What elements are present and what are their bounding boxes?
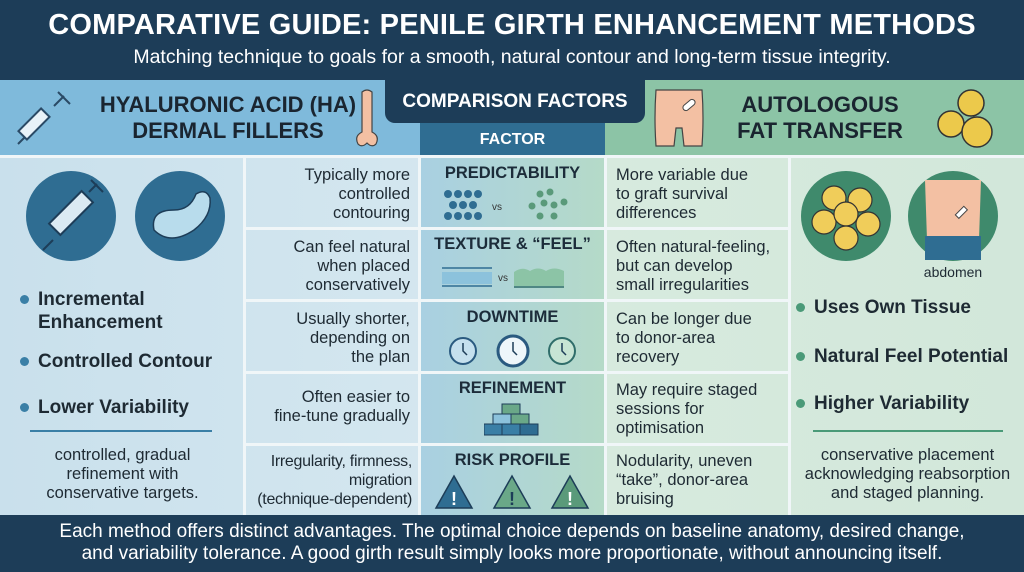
factor header: FACTOR [480, 131, 545, 148]
header: HA fillers [0, 80, 420, 155]
bullet list HA: Lower Variability [38, 397, 189, 418]
icon: fat cells circle [801, 171, 891, 261]
label abdomen: abdomen [924, 264, 982, 280]
icon: fat globules [937, 89, 993, 148]
text: to donor-area [616, 329, 715, 347]
text: fine-tune gradually [274, 407, 410, 425]
bullet list fat: Natural Feel Potential [814, 346, 1008, 367]
text: migration [349, 472, 412, 489]
text: May require staged [616, 381, 757, 399]
header text fat: FAT TRANSFER [737, 118, 903, 143]
factor: predictability [444, 164, 580, 220]
factor: downtime: DOWNTIME [467, 308, 558, 326]
subtitle: Matching technique to goals for a smooth, natural contour and long-term tissue integrity. [133, 46, 891, 68]
factor: predictability: PREDICTABILITY [445, 164, 580, 182]
bullet list HA [20, 289, 212, 418]
fat row texts: to graft survival [616, 185, 728, 203]
text: depending on [310, 329, 410, 347]
icon: gel [135, 171, 225, 261]
panel: HA left [20, 171, 225, 502]
comparison factors tab [385, 80, 645, 123]
bullet list fat [796, 297, 1008, 414]
footer: Each method offers distinct advantages. The optimal choice depends on baseline anatomy, desired change, [59, 521, 965, 542]
header: fat transfer [605, 80, 1024, 155]
factor: downtime [449, 308, 576, 368]
icon: body donor [654, 89, 704, 147]
text: the plan [351, 348, 410, 366]
text: Often natural-feeling, [616, 238, 770, 256]
text: when placed [317, 257, 410, 275]
background panels [0, 80, 512, 515]
text: Can feel natural [294, 238, 410, 256]
text: conservatively [305, 276, 410, 294]
text: but can develop [616, 257, 733, 275]
factor: risk profile: ! [567, 489, 573, 509]
summary fat: acknowledging reabsorption [805, 465, 1010, 483]
factor header [420, 123, 605, 155]
text: sessions for [616, 400, 704, 418]
text: Irregularity, firmness, [271, 453, 412, 470]
text: bruising [616, 490, 674, 508]
header text fat: AUTOLOGOUS [741, 92, 899, 117]
title band [0, 0, 1024, 80]
HA row texts [304, 166, 410, 222]
factor: predictability: vs [492, 202, 502, 213]
icon: abdomen [908, 171, 998, 261]
header text HA [100, 92, 356, 143]
factor: risk profile: ! [451, 489, 457, 509]
HA row texts: contouring [333, 204, 410, 222]
bullet list fat: Uses Own Tissue [814, 297, 971, 318]
text: Usually shorter, [296, 310, 410, 328]
summary HA: refinement with [67, 465, 178, 483]
icon: syringe circle [26, 171, 116, 261]
text: Often easier to [302, 388, 410, 406]
footer [0, 515, 1024, 572]
factor: texture: TEXTURE & “FEEL” [434, 235, 591, 253]
summary HA: controlled, gradual [55, 446, 190, 464]
text: optimisation [616, 419, 704, 437]
text: “take”, donor-area [616, 471, 748, 489]
summary fat: and staged planning. [831, 484, 984, 502]
HA row texts: controlled [338, 185, 410, 203]
summary HA: conservative targets. [46, 484, 199, 502]
fat row texts: differences [616, 204, 696, 222]
header text fat [737, 92, 903, 143]
HA row texts: Typically more [305, 166, 410, 184]
factor: risk profile: ! [509, 489, 515, 509]
bullet list fat: Higher Variability [814, 393, 969, 414]
icon: syringe [17, 91, 71, 145]
comparison factors tab: COMPARISON FACTORS [402, 91, 628, 112]
fat row texts [616, 166, 748, 222]
summary HA [46, 446, 199, 502]
header text HA: HYALURONIC ACID (HA) [100, 92, 356, 117]
factor: texture [434, 235, 591, 288]
factor: refinement [459, 379, 566, 436]
factor: risk profile: RISK PROFILE [455, 451, 570, 469]
text: recovery [616, 348, 679, 366]
summary fat [805, 446, 1010, 502]
text: (technique-dependent) [257, 491, 412, 508]
text: Nodularity, uneven [616, 452, 752, 470]
summary fat: conservative placement [821, 446, 994, 464]
text: small irregularities [616, 276, 749, 294]
grid lines [0, 155, 1024, 158]
panel: fat right [796, 171, 1010, 502]
bullet list HA: Enhancement [38, 312, 163, 333]
bullet list HA: Controlled Contour [38, 351, 212, 372]
footer: and variability tolerance. A good girth result simply looks more proportionate, without announcing itself. [82, 543, 942, 564]
factor: refinement: REFINEMENT [459, 379, 566, 397]
bullet list HA: Incremental [38, 289, 145, 310]
icon: anatomy [356, 89, 378, 146]
factor: texture: vs [498, 273, 508, 284]
text: Can be longer due [616, 310, 752, 328]
header text HA: DERMAL FILLERS [132, 118, 324, 143]
factor: risk profile [434, 451, 590, 509]
fat row texts: More variable due [616, 166, 748, 184]
factor column bg [420, 155, 605, 515]
title: COMPARATIVE GUIDE: PENILE GIRTH ENHANCEMENT METHODS [48, 9, 976, 41]
